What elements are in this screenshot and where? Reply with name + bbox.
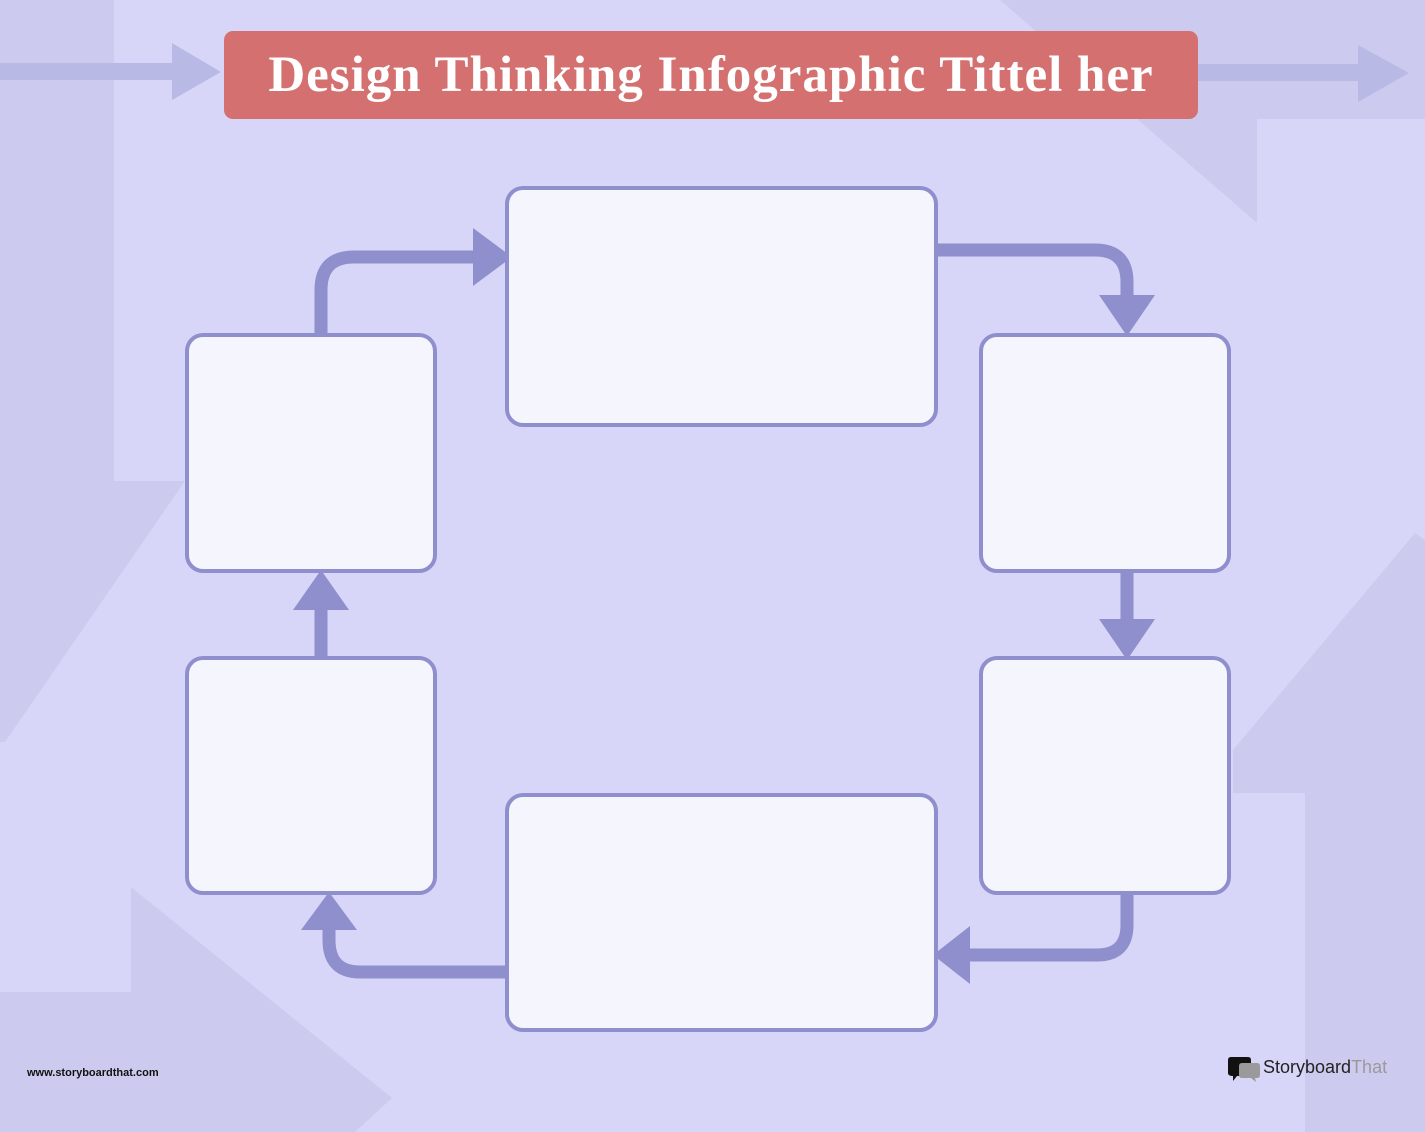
box: bottom [505, 793, 938, 1032]
box: top [505, 186, 938, 427]
logo: StoryboardThat [1263, 1057, 1387, 1077]
box: left upper [185, 333, 437, 573]
footer url: www.storyboardthat.com [27, 1067, 159, 1079]
box: left lower [185, 656, 437, 895]
logo [1228, 1057, 1387, 1082]
box: right upper [979, 333, 1231, 573]
box: right lower [979, 656, 1231, 895]
title [224, 31, 1198, 119]
title: Design Thinking Infographic Tittel her [268, 47, 1154, 103]
